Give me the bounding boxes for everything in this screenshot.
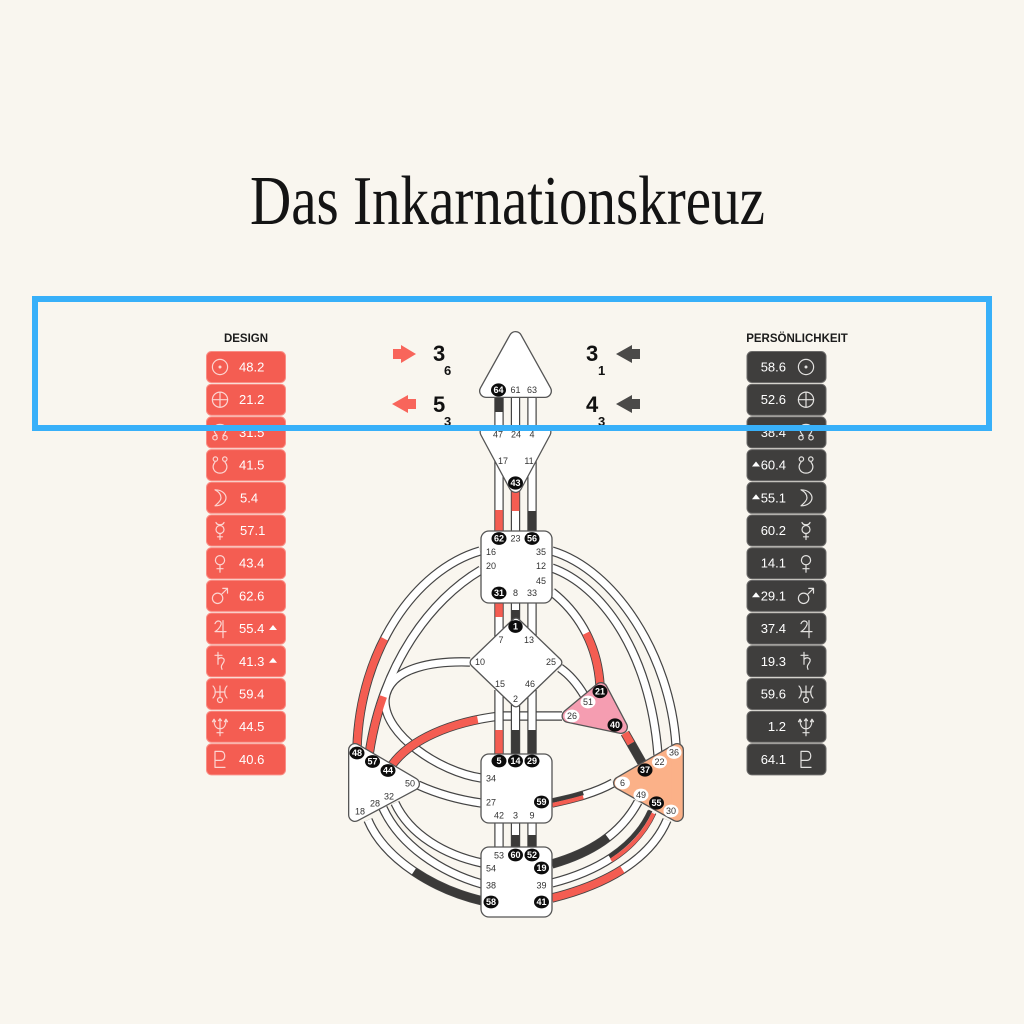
row: north node 38.4: 38.4 — [761, 425, 786, 440]
center: throat: 12 — [536, 561, 546, 571]
center: g: 15 — [495, 679, 505, 689]
row: uranus 59.4 — [206, 678, 286, 710]
center: root: 54 — [486, 864, 496, 874]
number: 5 sub 3: 5 — [433, 392, 445, 417]
panel: design column — [206, 333, 286, 775]
center: ajna: 17 — [498, 456, 508, 466]
title: Das Inkarnationskreuz — [250, 163, 765, 240]
center: spleen: 48 — [352, 748, 362, 758]
row: mercury 60.2: 60.2 — [761, 523, 786, 538]
number: 4 sub 3: 3 — [598, 414, 605, 429]
number: 5 sub 3 — [433, 392, 451, 429]
center: root: 60 — [510, 850, 521, 860]
row: uranus 59.6 — [747, 678, 826, 710]
row: north node 38.4 — [747, 417, 826, 448]
center: solar plexus: 49 — [636, 790, 646, 800]
center: throat: 8 — [513, 588, 518, 598]
number: 3 sub 6 — [433, 341, 451, 378]
row: moon 55.1 — [747, 482, 826, 513]
center: head: 64 — [493, 385, 504, 395]
center: sacral: 14 — [510, 756, 521, 766]
row: mercury 57.1 — [206, 515, 286, 546]
center: ego: 40 — [610, 720, 620, 730]
number: 4 sub 3 — [586, 392, 605, 429]
row: sun 58.6 — [747, 352, 826, 382]
center: throat: 56 — [527, 534, 537, 544]
row: north node 31.5: 31.5 — [239, 425, 264, 440]
center: g: 46 — [525, 679, 535, 689]
heading: persönlichkeit: PERSÖNLICHKEIT — [746, 332, 848, 345]
center: sacral: 34 — [486, 774, 496, 784]
center: g: 1 — [513, 622, 518, 632]
center: g: 13 — [524, 635, 534, 645]
center: sacral: 27 — [486, 798, 496, 808]
row: venus 43.4: 43.4 — [239, 556, 264, 571]
row: neptune 44.5 — [206, 711, 286, 742]
center: spleen: 44 — [383, 766, 393, 776]
center: root: 58 — [486, 897, 496, 907]
channels: arcs — [357, 551, 676, 901]
panel: personality column — [746, 332, 848, 775]
center: root: 41 — [536, 897, 547, 907]
center: throat: 33 — [527, 588, 537, 598]
center: sacral: 59 — [536, 797, 547, 807]
number: 3 sub 6: 6 — [444, 363, 451, 378]
row: mars 29.1: 29.1 — [761, 588, 786, 603]
center: throat: 23 — [510, 534, 521, 544]
highlight frame — [35, 299, 989, 428]
number: 3 sub 1: 3 — [586, 341, 598, 366]
row: mars 62.6 — [206, 580, 286, 611]
row: pluto 40.6 — [206, 744, 286, 775]
row: sun 48.2 — [206, 352, 286, 382]
center: g — [474, 620, 558, 704]
center: sacral: 3 — [513, 810, 518, 820]
row: jupiter 55.4 — [206, 613, 286, 644]
center: ajna: 11 — [524, 456, 534, 466]
row: earth 21.2: 21.2 — [239, 392, 264, 407]
center: sacral: 42 — [494, 810, 504, 820]
row: mars 29.1 — [747, 580, 826, 611]
center: root: 38 — [486, 880, 496, 890]
number: 4 sub 3: 4 — [586, 392, 599, 417]
center: throat: 20 — [486, 561, 496, 571]
center: ajna: 43 — [510, 478, 521, 488]
center: ego: 51 — [583, 697, 593, 707]
center: solar plexus: 22 — [654, 757, 665, 767]
center: sacral: 9 — [529, 810, 535, 820]
row: venus 43.4 — [206, 548, 286, 579]
row: earth 21.2 — [206, 384, 286, 415]
row: south node 41.5: 41.5 — [239, 458, 264, 473]
center: ego — [564, 685, 622, 732]
number: 3 sub 1 — [586, 341, 605, 378]
row: uranus 59.4: 59.4 — [239, 686, 264, 702]
channels: vertical — [499, 398, 532, 850]
center: head: 63 — [527, 385, 537, 395]
row: neptune 44.5: 44.5 — [239, 719, 264, 734]
row: pluto 64.1: 64.1 — [761, 752, 786, 767]
center: spleen: 28 — [370, 798, 380, 808]
center: throat: 62 — [494, 534, 504, 544]
center: ajna: 4 — [529, 430, 535, 440]
center: solar plexus: 55 — [651, 798, 662, 808]
center: throat: 35 — [536, 547, 546, 557]
row: south node 41.5 — [206, 450, 286, 481]
row: venus 14.1 — [747, 548, 826, 579]
arrow: personality bottom — [616, 395, 640, 413]
row: saturn 41.3 — [206, 646, 286, 677]
row: moon 55.1: 55.1 — [761, 490, 786, 505]
row: neptune 1.2: 1.2 — [768, 719, 786, 734]
center: spleen: 18 — [355, 806, 365, 816]
row: saturn 41.3: 41.3 — [239, 654, 264, 669]
center: ajna: 24 — [511, 430, 521, 440]
center: head — [486, 338, 545, 397]
center: sacral — [481, 754, 552, 823]
row: pluto 64.1 — [747, 744, 826, 775]
row: saturn 19.3 — [747, 646, 826, 677]
center: root: 39 — [536, 880, 547, 890]
row: south node 60.4: 60.4 — [761, 458, 786, 473]
row: earth 52.6: 52.6 — [761, 392, 786, 407]
center: root: 52 — [527, 850, 537, 860]
row: earth 52.6 — [747, 384, 826, 415]
center: solar plexus: 37 — [640, 765, 650, 775]
center: spleen: 50 — [405, 778, 415, 788]
row: saturn 19.3: 19.3 — [761, 654, 786, 669]
arrow: design top — [393, 345, 416, 363]
center: solar plexus: 6 — [620, 778, 625, 788]
center: throat: 16 — [486, 547, 496, 557]
row: venus 14.1: 14.1 — [761, 556, 786, 571]
center: sacral: 29 — [527, 756, 537, 766]
heading: design: DESIGN — [224, 333, 268, 345]
center: throat: 31 — [494, 588, 504, 598]
row: neptune 1.2 — [747, 711, 826, 742]
center: g: 10 — [475, 657, 485, 667]
row: jupiter 37.4 — [747, 613, 826, 644]
row: uranus 59.6: 59.6 — [761, 686, 786, 702]
row: moon 5.4: 5.4 — [240, 490, 258, 505]
arrows and cross numbers — [392, 341, 640, 429]
row: jupiter 37.4: 37.4 — [761, 621, 786, 636]
center: solar plexus: 30 — [666, 806, 676, 816]
center: ajna: 47 — [493, 430, 503, 440]
center: root: 19 — [536, 863, 547, 873]
center: head: 61 — [510, 385, 521, 395]
center: g: 2 — [513, 694, 518, 704]
center: spleen — [350, 747, 415, 816]
row: jupiter 55.4: 55.4 — [239, 621, 264, 636]
arrow: design bottom — [392, 395, 416, 413]
number: 5 sub 3: 3 — [444, 414, 451, 429]
center: spleen: 57 — [367, 757, 378, 767]
center: ajna — [486, 430, 544, 490]
center: spleen: 32 — [384, 792, 394, 802]
center: root — [481, 847, 552, 917]
row: mars 62.6: 62.6 — [239, 588, 264, 603]
row: pluto 40.6: 40.6 — [239, 752, 264, 767]
center: ego: 21 — [595, 687, 605, 697]
row: mercury 57.1: 57.1 — [240, 523, 265, 538]
center: solar plexus — [615, 746, 682, 817]
center: throat — [481, 531, 552, 603]
bodygraph chart — [350, 338, 682, 917]
row: sun 48.2: 48.2 — [239, 360, 264, 374]
row: north node 31.5 — [206, 417, 286, 448]
row: south node 60.4 — [747, 450, 826, 481]
row: mercury 60.2 — [747, 515, 826, 546]
number: 3 sub 6: 3 — [433, 341, 445, 366]
center: sacral: 5 — [496, 756, 502, 766]
center: ego: 26 — [567, 711, 577, 721]
center: g: 7 — [498, 635, 504, 645]
row: moon 5.4 — [206, 482, 286, 513]
row: sun 58.6: 58.6 — [761, 360, 786, 374]
center: g: 25 — [546, 657, 556, 667]
center: root: 53 — [494, 850, 504, 860]
center: throat: 45 — [536, 576, 546, 586]
center: solar plexus: 36 — [669, 748, 679, 758]
arrow: personality top — [616, 345, 640, 363]
number: 3 sub 1: 1 — [598, 363, 605, 378]
